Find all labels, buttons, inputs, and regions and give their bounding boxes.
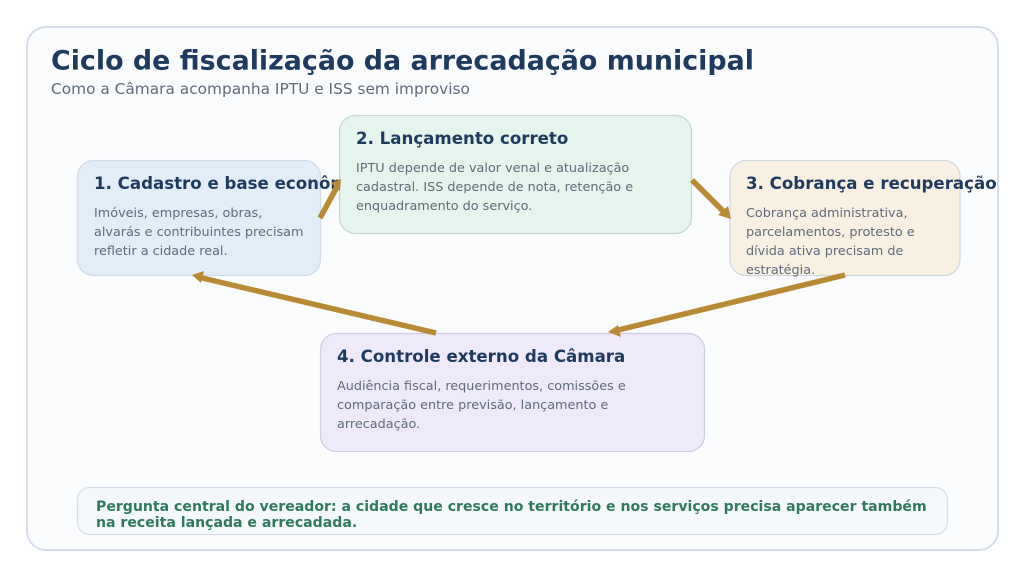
panel: step 4 controle externo: Audiência fiscal, requerimentos, comissões e [337,379,626,394]
panel: step 3 cobrança: estratégia. [746,263,815,278]
title: Ciclo de fiscalização da arrecadação municipal [51,46,754,76]
panel: step 3 cobrança [730,160,997,278]
panel: step 2 lançamento [340,116,692,234]
arrow: step 1 to step 2 [320,179,341,218]
panel: step 1 cadastro: Imóveis, empresas, obras, [94,206,262,221]
subtitle: Como a Câmara acompanha IPTU e ISS sem improviso [51,80,470,98]
panel: step 2 lançamento: 2. Lançamento correto [356,129,568,148]
panel: step 4 controle externo: comparação entre previsão, lançamento e [337,398,608,413]
panel: step 1 cadastro: 1. Cadastro e base econômica [94,174,375,193]
callout: central question [78,488,948,534]
arrow: step 2 to step 3 [692,180,731,219]
panel: step 2 lançamento: cadastral. ISS depende de nota, retenção e [356,180,633,195]
panel: step 1 cadastro: refletir a cidade real. [94,244,228,259]
panel: step 2 lançamento: enquadramento do serviço. [356,199,532,214]
panel: step 1 cadastro: alvarás e contribuintes precisam [94,225,303,240]
arrow: step 4 to step 1 [192,271,436,333]
panel: step 3 cobrança: parcelamentos, protesto e [746,225,915,240]
panel: step 4 controle externo: arrecadação. [337,417,420,432]
callout: central question: Pergunta central do vereador: a cidade que cresce no território e nos serviços precisa aparecer também [96,499,927,515]
panel: step 4 controle externo: 4. Controle externo da Câmara [337,347,625,366]
callout: central question: na receita lançada e arrecadada. [96,515,357,531]
panel: step 4 controle externo [320,334,704,452]
arrow: step 3 to step 4 [608,275,845,337]
panel: step 3 cobrança: 3. Cobrança e recuperação [746,174,997,193]
panel: step 2 lançamento: IPTU depende de valor venal e atualização [356,161,629,176]
panel: step 3 cobrança: dívida ativa precisam de [746,244,903,259]
panel: step 3 cobrança: Cobrança administrativa, [746,206,908,221]
panel: step 1 cadastro [78,160,375,276]
